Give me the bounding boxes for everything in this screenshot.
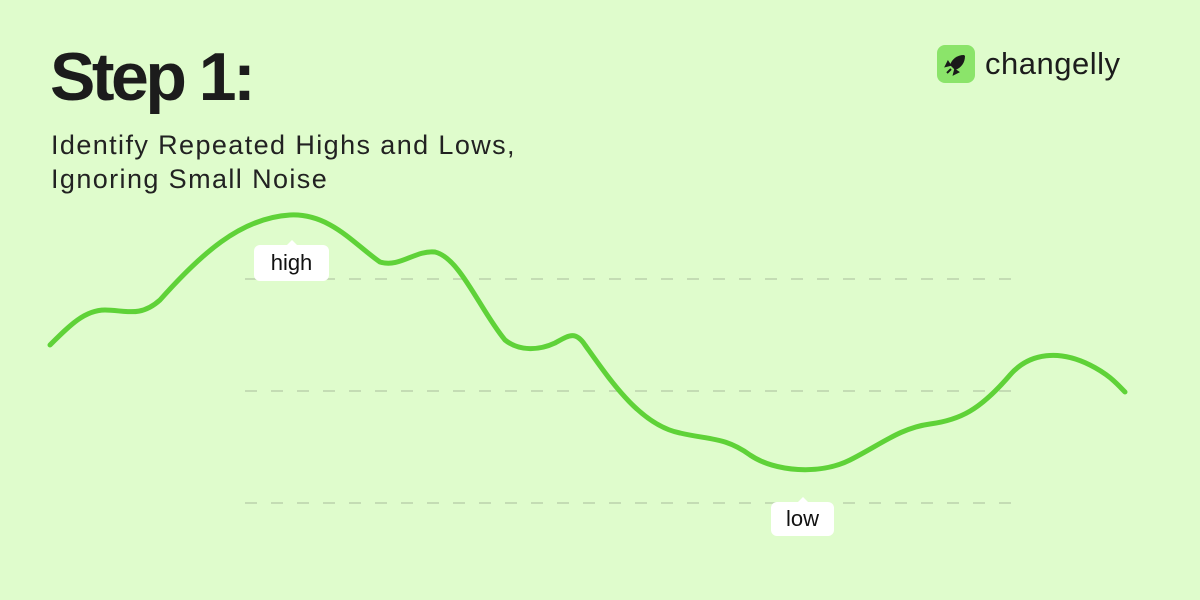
subtitle: Identify Repeated Highs and Lows, [51,130,516,160]
icon: rocket [937,45,975,83]
subtitle: Ignoring Small Noise [51,164,328,194]
label: high [254,245,329,281]
wordmark: changelly [985,46,1120,81]
logo [937,45,1120,83]
label: high: high [271,250,312,275]
price line [50,215,1125,470]
label: low: low [786,506,819,531]
label: low [771,502,834,536]
subtitle [51,130,516,194]
title: Step 1: [50,39,252,115]
